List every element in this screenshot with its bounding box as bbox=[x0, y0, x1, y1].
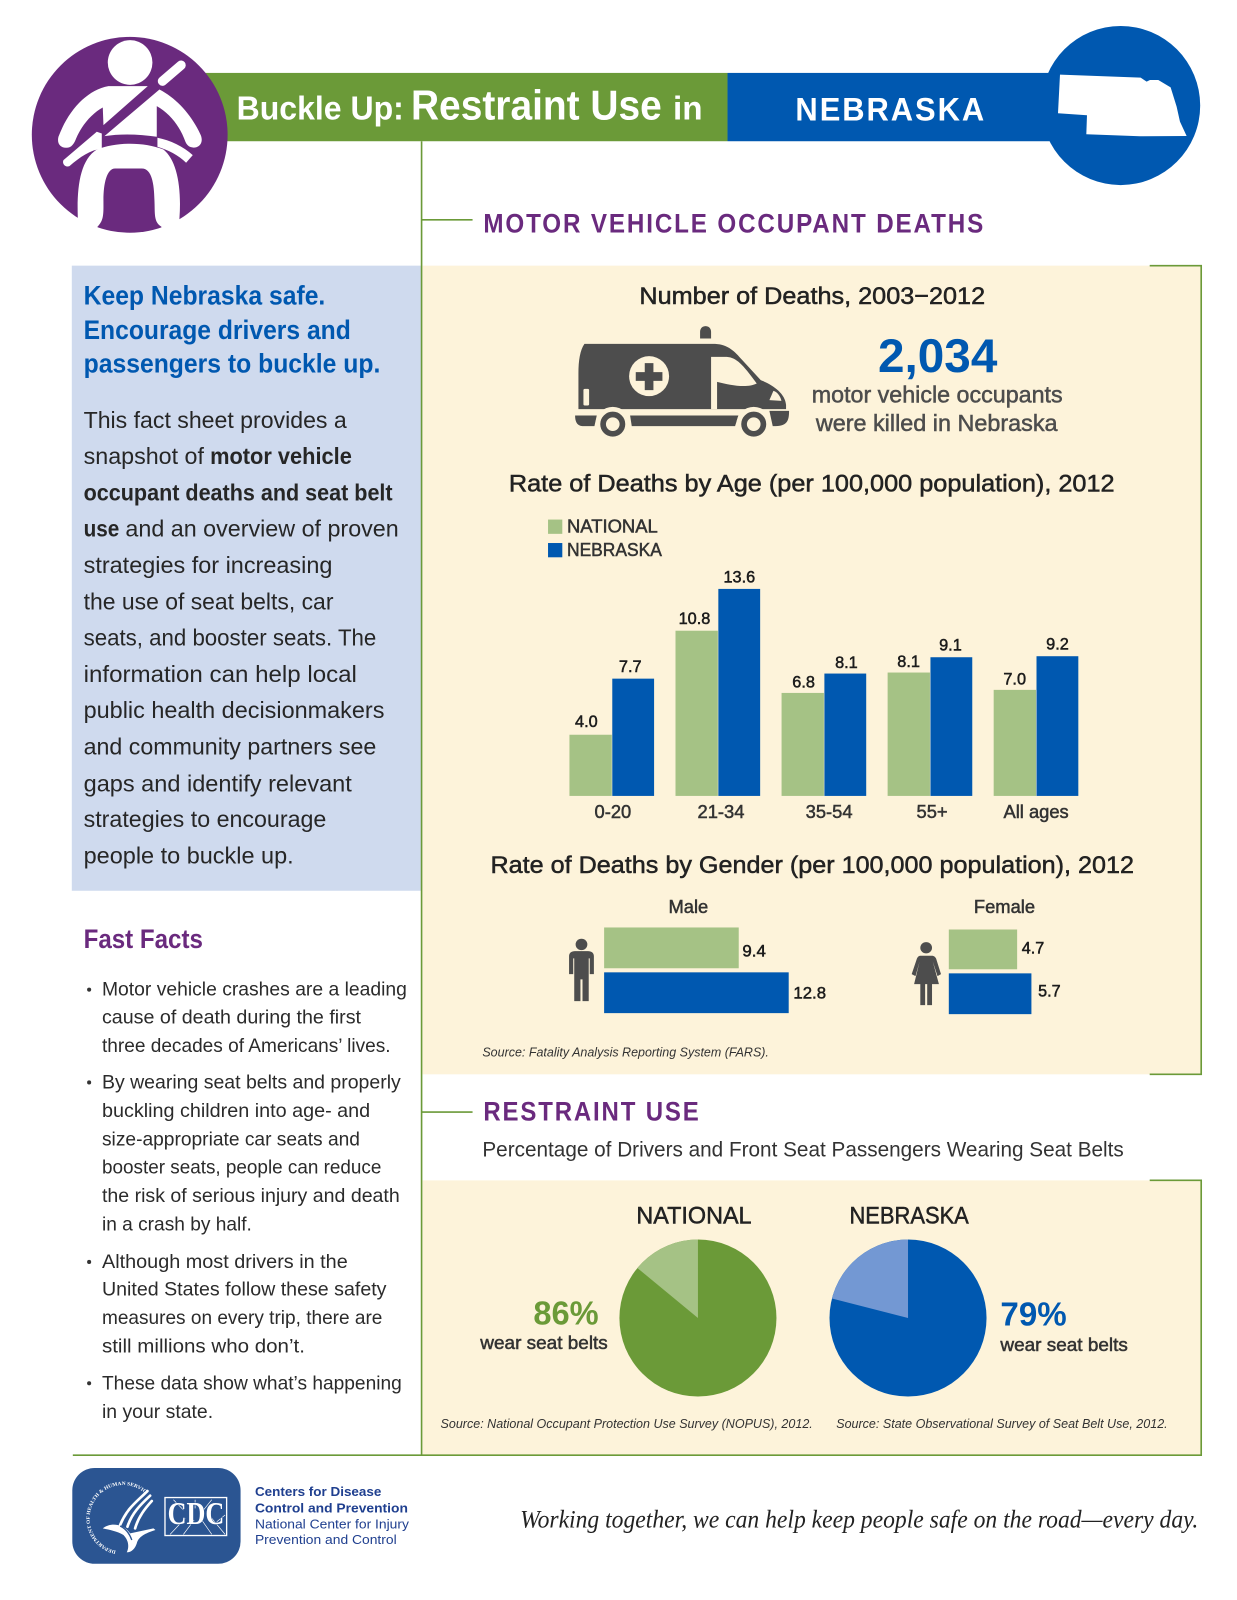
callout: 2,034 deaths: were killed in Nebraska bbox=[815, 410, 1058, 436]
title: Restraint Use bbox=[411, 81, 662, 128]
logo: HHS and CDC bbox=[72, 1468, 241, 1564]
intro paragraph: and community partners see bbox=[84, 734, 376, 760]
age group all ages: 9.2 bbox=[1046, 636, 1069, 654]
intro paragraph: people to buckle up. bbox=[84, 843, 294, 869]
logo: HHS and CDC: DEPARTMENT OF HEALTH & HUMAN SERVICES·USA bbox=[86, 1482, 146, 1554]
icon: Nebraska state map bbox=[1041, 26, 1200, 185]
panel: motor vehicle occupant deaths background bbox=[423, 266, 1201, 1074]
fast fact 3 bbox=[87, 1251, 387, 1358]
fast fact 1: three decades of Americans’ lives. bbox=[102, 1035, 391, 1057]
fast fact 1 bbox=[87, 978, 407, 1057]
age group 35-54: 35-54 bbox=[806, 801, 853, 822]
age group 0-20: 7.7 bbox=[619, 658, 642, 676]
panel: restraint use background bbox=[423, 1180, 1201, 1456]
title: Buckle Up: bbox=[237, 90, 404, 127]
fast fact 3: still millions who don’t. bbox=[102, 1336, 305, 1358]
header banner bbox=[204, 73, 1064, 141]
pie chart: national: NATIONAL bbox=[636, 1203, 752, 1230]
age group 35-54: 6.8 bbox=[792, 673, 815, 691]
title bbox=[237, 81, 703, 128]
intro heading: Keep Nebraska safe. bbox=[84, 280, 325, 310]
agency name: Prevention and Control bbox=[255, 1532, 397, 1547]
age group all ages bbox=[994, 636, 1078, 822]
intro paragraph: and an overview of proven bbox=[125, 515, 399, 541]
pie chart: Nebraska bbox=[829, 1203, 1128, 1397]
icon: person wearing seat belt bbox=[32, 37, 228, 235]
age group all ages: 7.0 bbox=[1003, 670, 1026, 688]
bar chart: female: Female bbox=[974, 896, 1035, 917]
age group 21-34: 21-34 bbox=[698, 801, 744, 822]
intro paragraph: gaps and identify relevant bbox=[84, 770, 352, 796]
fast fact 2: By wearing seat belts and properly bbox=[102, 1072, 401, 1094]
intro paragraph: strategies to encourage bbox=[84, 806, 326, 832]
age group 21-34: 10.8 bbox=[679, 610, 710, 628]
age group 55+ bbox=[888, 637, 972, 822]
intro paragraph: strategies for increasing bbox=[84, 552, 332, 578]
bar chart: female: 4.7 bbox=[1022, 939, 1044, 957]
fast fact 4: These data show what’s happening bbox=[102, 1372, 402, 1394]
tagline: Working together, we can help keep people safe on the road—every day. bbox=[520, 1505, 1198, 1534]
age group 35-54: 8.1 bbox=[835, 654, 858, 672]
heading: rate of deaths by gender: Rate of Deaths by Gender (per 100,000 population), 2012 bbox=[491, 852, 1134, 879]
age group 21-34: 13.6 bbox=[723, 568, 755, 586]
age group 55+: 9.1 bbox=[939, 637, 962, 655]
source: NOPUS: Source: National Occupant Protection Use Survey (NOPUS), 2012. bbox=[441, 1416, 813, 1431]
source: state survey: Source: State Observational Survey of Seat Belt Use, 2012. bbox=[836, 1416, 1168, 1431]
intro paragraph: the use of seat belts, car bbox=[84, 588, 334, 614]
intro heading: Encourage drivers and bbox=[84, 315, 351, 345]
panel: fast facts bbox=[84, 924, 407, 1423]
icon: ambulance bbox=[575, 326, 789, 441]
panel: intro background bbox=[72, 266, 422, 891]
heading: restraint use: RESTRAINT USE bbox=[483, 1097, 701, 1127]
bar chart: rate of deaths by age bbox=[569, 568, 1078, 822]
heading: motor vehicle occupant deaths: MOTOR VEHICLE OCCUPANT DEATHS bbox=[483, 209, 985, 239]
intro heading: passengers to buckle up. bbox=[84, 349, 380, 379]
fast fact 1: Motor vehicle crashes are a leading bbox=[102, 978, 407, 1000]
legend: NEBRASKA bbox=[567, 539, 663, 560]
age group 55+: 55+ bbox=[917, 801, 948, 822]
intro heading bbox=[84, 280, 380, 379]
fast fact 3: United States follow these safety bbox=[102, 1279, 387, 1301]
intro paragraph bbox=[84, 407, 399, 869]
legend: NATIONAL bbox=[567, 515, 658, 536]
logo: HHS and CDC: CDC bbox=[168, 1496, 224, 1531]
age group 0-20 bbox=[569, 658, 654, 822]
agency name: Control and Prevention bbox=[255, 1500, 408, 1515]
heading: rate of deaths by age: Rate of Deaths by Age (per 100,000 population), 2012 bbox=[509, 471, 1115, 498]
age group 35-54 bbox=[782, 654, 866, 822]
fast fact 3: measures on every trip, there are bbox=[102, 1307, 382, 1329]
fast fact 4: in your state. bbox=[102, 1401, 213, 1423]
age group 21-34 bbox=[676, 568, 760, 822]
age group 0-20: 4.0 bbox=[575, 713, 598, 731]
fast fact 1: cause of death during the first bbox=[102, 1006, 362, 1028]
pie chart: Nebraska: 79% bbox=[1000, 1297, 1067, 1334]
intro paragraph: snapshot of bbox=[84, 443, 204, 469]
icon: man bbox=[569, 939, 594, 1001]
fast fact 2: buckling children into age- and bbox=[102, 1100, 370, 1122]
intro paragraph: occupant deaths and seat belt bbox=[84, 480, 393, 506]
fast fact 2 bbox=[87, 1072, 401, 1235]
panel: intro text bbox=[84, 280, 399, 869]
age group all ages: All ages bbox=[1003, 801, 1069, 822]
callout: 2,034 deaths bbox=[812, 330, 1063, 436]
state name: NEBRASKA bbox=[795, 90, 986, 127]
source: FARS: Source: Fatality Analysis Reporting System (FARS). bbox=[482, 1044, 769, 1059]
callout: 2,034 deaths: motor vehicle occupants bbox=[812, 381, 1063, 407]
age group 0-20: 0-20 bbox=[595, 801, 631, 822]
heading: number of deaths: Number of Deaths, 2003−2012 bbox=[639, 283, 985, 310]
pie chart: Nebraska: wear seat belts bbox=[999, 1334, 1128, 1355]
agency name: Centers for Disease bbox=[255, 1484, 381, 1499]
callout: 2,034 deaths: 2,034 bbox=[878, 330, 997, 382]
bar chart: male: 12.8 bbox=[793, 984, 826, 1002]
pie chart: national bbox=[479, 1203, 776, 1397]
pie chart: Nebraska: NEBRASKA bbox=[849, 1203, 969, 1230]
intro paragraph: seats, and booster seats. The bbox=[84, 625, 376, 651]
intro paragraph: use bbox=[84, 515, 119, 541]
pie chart: national: wear seat belts bbox=[479, 1332, 608, 1353]
agency name bbox=[255, 1484, 409, 1547]
icon: woman bbox=[912, 942, 941, 1005]
agency name: National Center for Injury bbox=[255, 1517, 409, 1532]
bar chart: male: Male bbox=[668, 896, 708, 917]
fast fact 2: size-appropriate car seats and bbox=[102, 1129, 360, 1151]
title: in bbox=[673, 90, 703, 127]
fast facts heading: Fast Facts bbox=[84, 924, 203, 954]
intro paragraph: public health decisionmakers bbox=[84, 697, 384, 723]
fast fact 4 bbox=[87, 1372, 402, 1423]
intro paragraph: information can help local bbox=[84, 661, 357, 687]
fast fact 2: in a crash by half. bbox=[102, 1213, 252, 1235]
fast fact 2: the risk of serious injury and death bbox=[102, 1185, 400, 1207]
age group 55+: 8.1 bbox=[897, 653, 920, 671]
fast fact 3: Although most drivers in the bbox=[102, 1251, 348, 1273]
subheading: percentage wearing seat belts: Percentage of Drivers and Front Seat Passengers Wearing Seat Belts bbox=[482, 1137, 1124, 1161]
legend bbox=[548, 515, 663, 560]
pie chart: national: 86% bbox=[533, 1296, 599, 1333]
fast fact 2: booster seats, people can reduce bbox=[102, 1157, 381, 1179]
intro paragraph: motor vehicle bbox=[210, 443, 352, 469]
bar chart: male bbox=[569, 896, 826, 1013]
bar chart: female: 5.7 bbox=[1038, 982, 1061, 1000]
bar chart: female bbox=[912, 896, 1061, 1014]
bar chart: male: 9.4 bbox=[742, 943, 766, 961]
intro paragraph: This fact sheet provides a bbox=[84, 407, 348, 433]
